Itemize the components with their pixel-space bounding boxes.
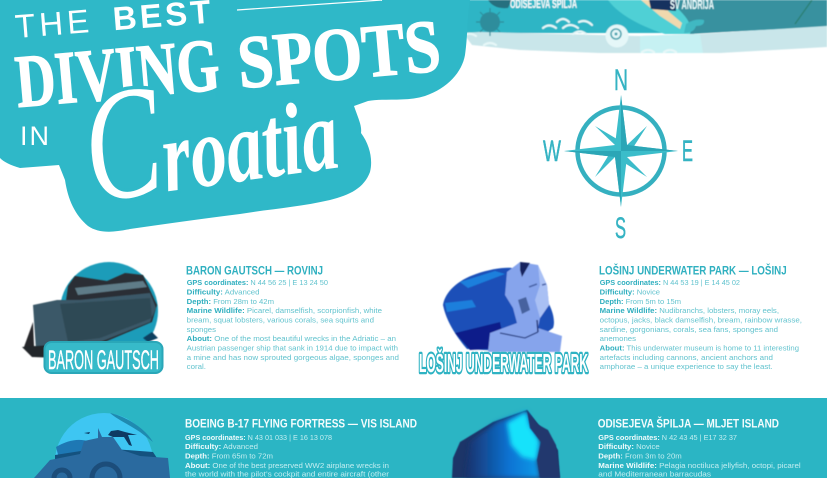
lower teal band [0,398,827,478]
details: Depth: From 65m to 72m [185,452,273,460]
details: Marine Wildlife: Picarel, damselfish, scorpionfish, white [187,306,382,315]
title: diving spots: SPOTS [234,5,444,105]
details: sardine, gorgonians, corals, sea fans, sponges and [600,325,778,334]
panel: Lošinj text [599,262,802,371]
title: diving spots [12,5,444,124]
heading: BARON GAUTSCH — ROVINJ [186,264,323,278]
title: Croatia script: Croatia [72,25,346,237]
details: Depth: From 5m to 15m [600,297,681,306]
details: Difficulty: Advanced [187,288,260,296]
small fish [84,432,90,434]
heading: BOEING B-17 FLYING FORTRESS — VIS ISLAND [185,416,417,430]
illustration: Lošinj statue [419,262,588,378]
details: artefacts including cannons, ancient anchors and [600,353,773,362]
illustration: Baron Gautsch wreck [22,262,162,375]
label: Lošinj Underwater Park [419,348,588,378]
top illustrated sea banner [460,0,827,53]
compass [543,64,693,245]
details: About: One of the best preserved WW2 airplane wrecks in [185,461,389,470]
panel: Odisejeva text [598,416,801,478]
details: Austrian passenger ship that sank in 1914 due to impact with [187,344,398,352]
compass: E [682,135,693,168]
compass: S [615,212,626,245]
details: Depth: From 28m to 42m [187,297,274,306]
details [598,433,801,478]
title: the best: THE [14,2,90,45]
details: Depth: From 3m to 20m [598,452,682,460]
details: Difficulty: Novice [598,442,660,451]
scuba diver silhouette [108,430,137,446]
details: About: One of the most beautiful wrecks in the Adriatic – an [187,334,396,343]
details: GPS coordinates: N 43 01 033 | E 16 13 078 [185,433,332,442]
compass minor points [595,126,647,177]
details [600,278,802,371]
details: a mine and has now sprouted gorgeous algae, sponges and [187,353,399,362]
details: amphorae – a unique experience to say the least. [600,362,773,371]
illustration: Boeing B-17 wreck [34,413,170,478]
label: Baron Gautsch [44,342,162,375]
sea urchin [476,8,504,36]
details: GPS coordinates: N 44 56 25 | E 13 24 50 [187,278,328,287]
compass: W [543,135,561,168]
panel: Boeing text [185,416,417,478]
text: BARON GAUTSCH [48,345,159,375]
compass ring [578,108,664,194]
details: Marine Wildlife: Nudibranchs, lobsters, moray eels, [600,306,779,315]
details [185,433,390,478]
spiral shell [606,24,628,48]
details: GPS coordinates: N 42 43 45 | E17 32 37 [598,433,737,442]
text: LOŠINJ UNDERWATER PARK [419,348,588,378]
details [187,278,399,371]
details: GPS coordinates: N 44 53 19 | E 14 45 02 [600,278,740,287]
white shell arcs [464,19,676,52]
decorative title line [237,0,382,10]
panel: Baron Gautsch text [186,264,399,371]
dark coral [488,0,512,8]
diver [641,0,704,33]
details: Difficulty: Advanced [185,442,258,451]
details: sponges [187,325,216,334]
details: anemones [600,334,636,343]
heading: LOŠINJ UNDERWATER PARK — LOŠINJ [599,262,787,278]
title: in: IN [20,121,49,151]
title [12,0,444,237]
compass letters: N [614,64,628,97]
title: diving spots: DIVING [12,23,223,124]
details: octopus, jacks, black damselfish, bream, rainbow wrasse, [600,316,802,324]
illustration: Odisejeva cave [452,410,560,478]
details: About: This underwater museum is home to 11 interesting [600,344,799,352]
details: bream, squat lobsters, various corals, sea squirts and [187,316,374,324]
details: coral. [187,362,206,371]
title banner shape [0,0,470,232]
details: Difficulty: Novice [600,288,660,296]
title: the best [14,0,212,45]
propeller rings [54,464,120,478]
text: LOŠINJ UNDERWATER PARK [419,348,588,378]
details: Marine Wildlife: Pelagia noctiluca jellyfish, octopi, picarel [598,461,801,470]
heading: ODISEJEVA ŠPILJA — MLJET ISLAND [598,416,779,430]
compass major points [564,95,678,207]
